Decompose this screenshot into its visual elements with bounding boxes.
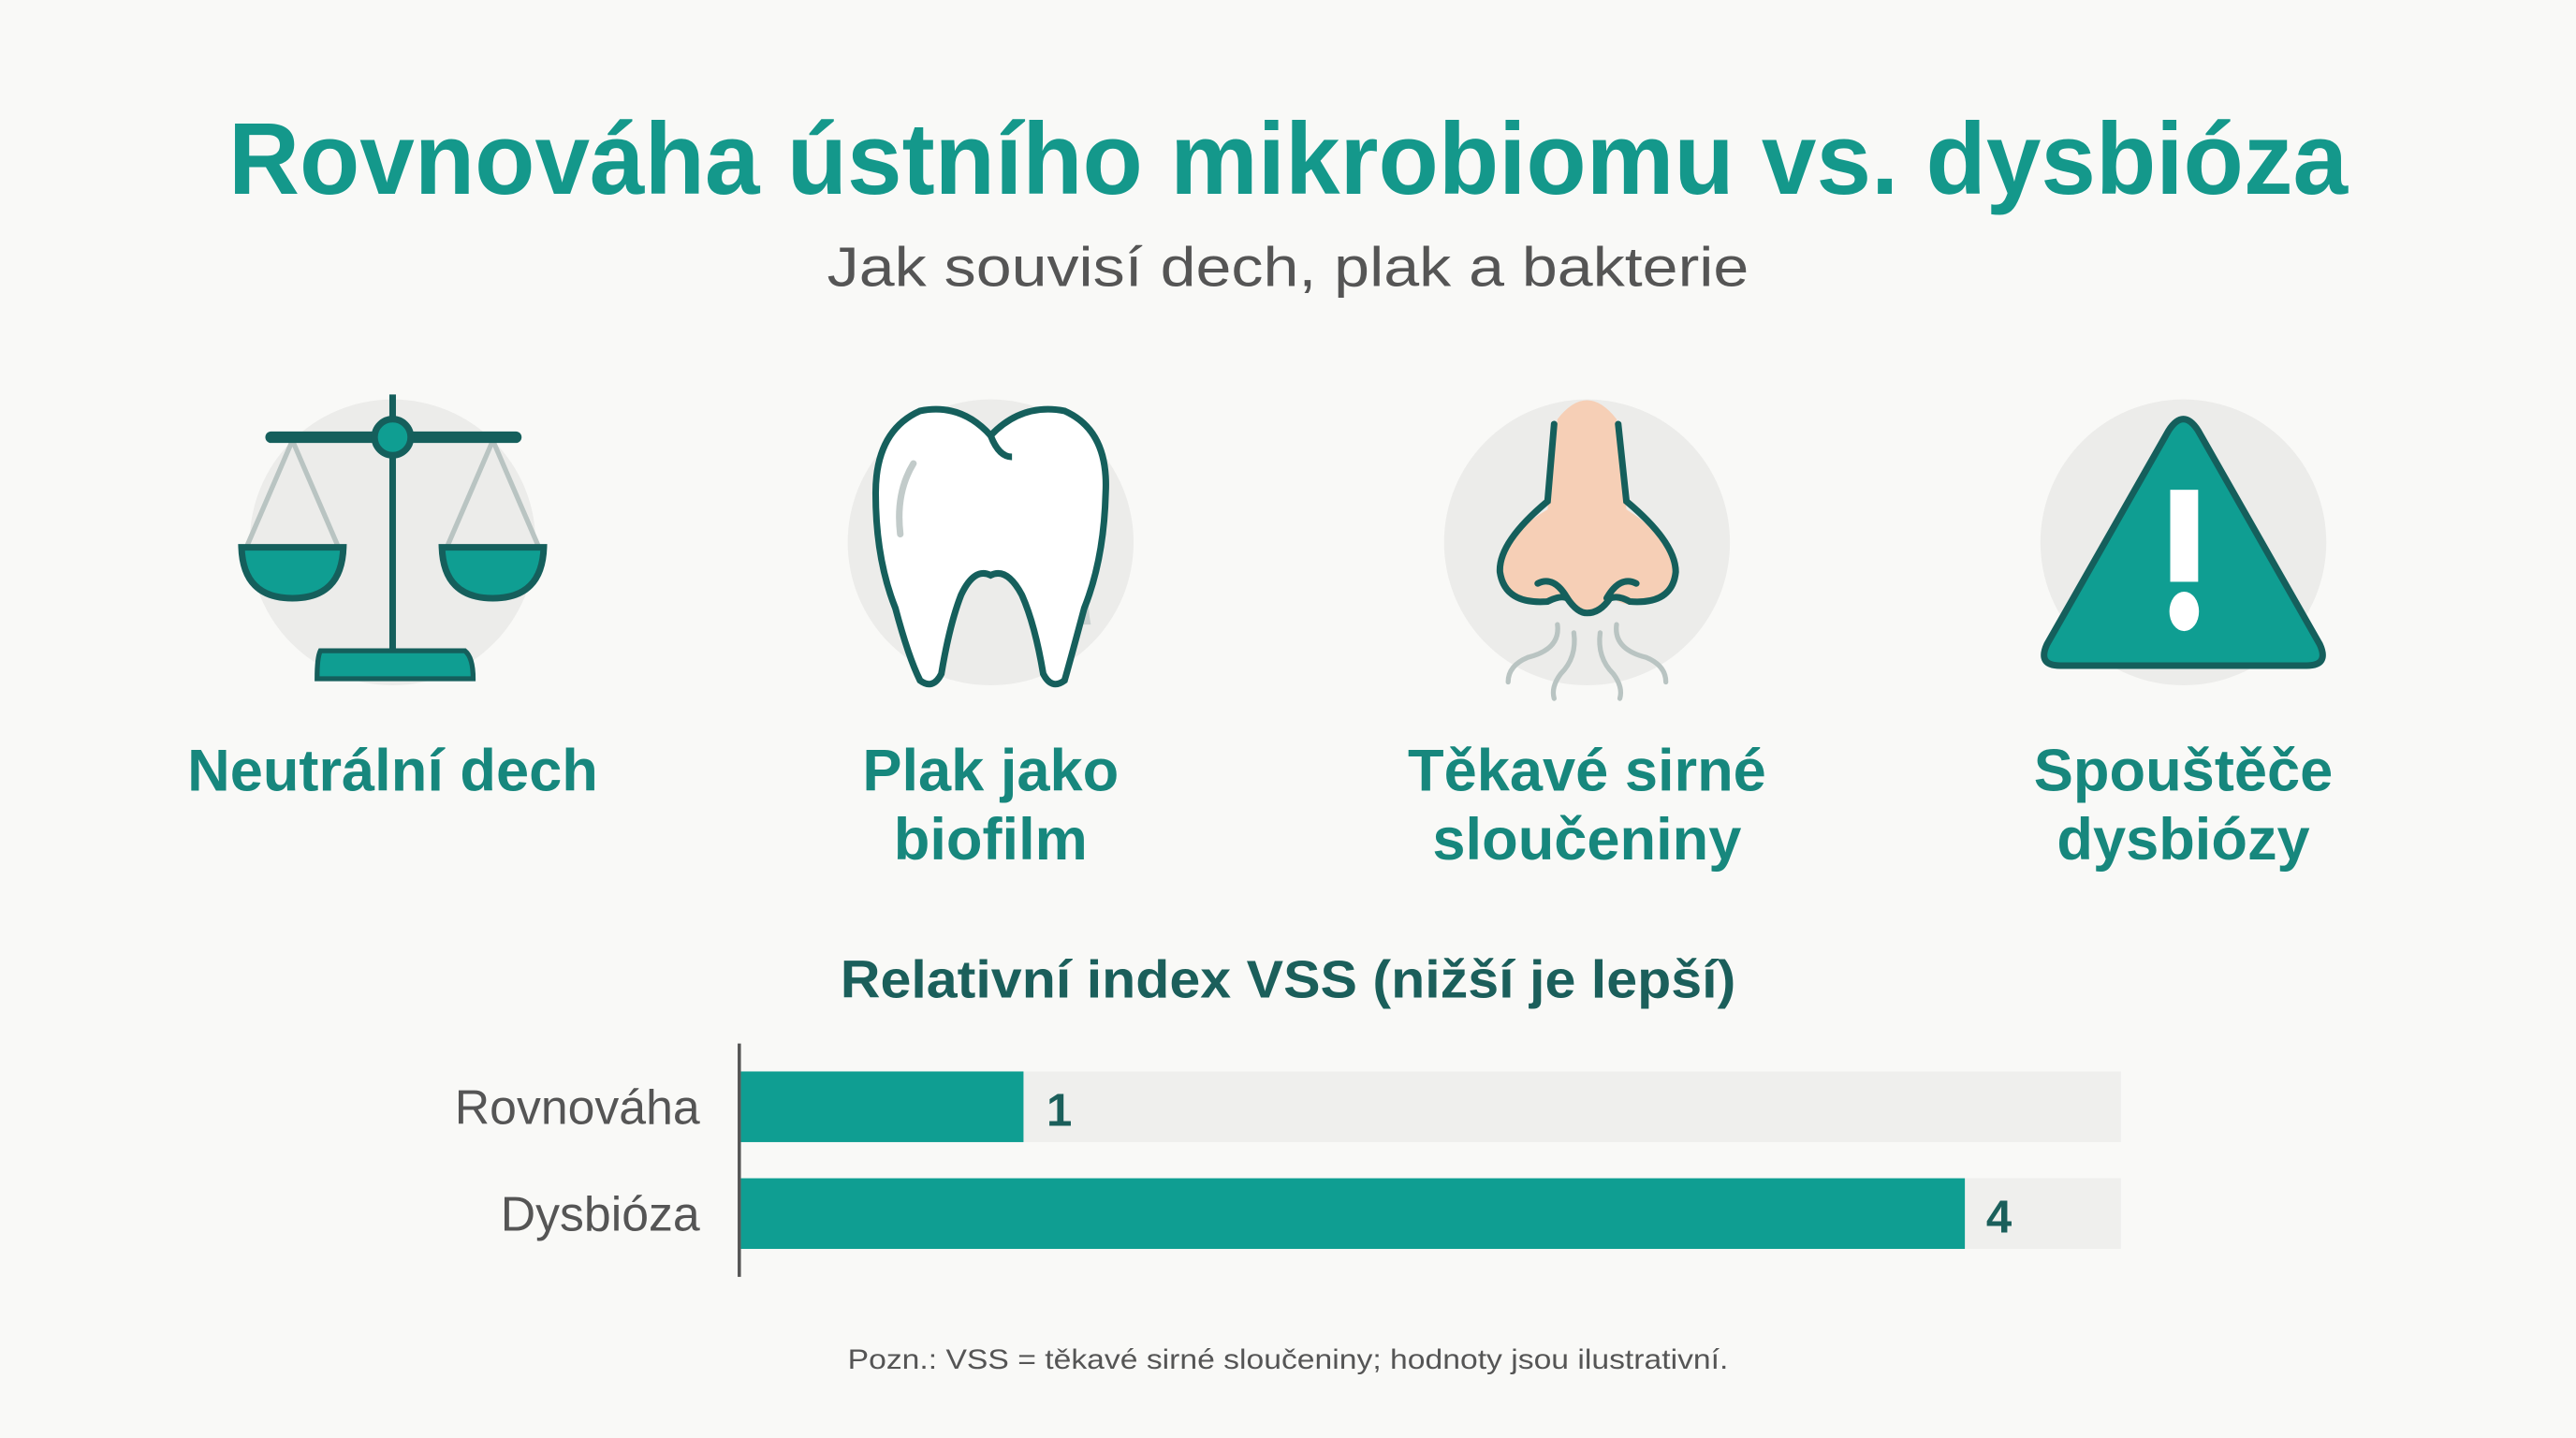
bar: Rovnováha (455, 1071, 2121, 1142)
label: plaque as biofilm: Plak jako (862, 738, 1119, 803)
panel: dysbiosis triggers (2034, 400, 2333, 873)
panel: neutral breath (187, 394, 598, 803)
bar chart (455, 1044, 2121, 1277)
bar: Rovnováha: Rovnováha (455, 1080, 700, 1135)
icon: tooth (848, 400, 1134, 685)
chart title: Relativní index VSS (nižší je lepší) (841, 949, 1735, 1008)
bar: Dysbióza: Dysbióza (501, 1187, 700, 1241)
bar: Rovnováha: 1 (1046, 1085, 1072, 1136)
panel: plaque: biofilm (894, 807, 1088, 873)
icon: warning triangle (2041, 400, 2326, 685)
panel: VSC: sloučeniny (1432, 807, 1741, 873)
subtitle: Jak souvisí dech, plak a bakterie (827, 236, 1749, 299)
footnote: Pozn.: VSS = těkavé sirné sloučeniny; hodnoty jsou ilustrativní. (848, 1344, 1728, 1375)
title: Rovnováha ústního mikrobiomu vs. dysbióza (228, 102, 2349, 216)
panel: plaque (848, 400, 1134, 873)
icon: nose (1444, 400, 1730, 698)
label: neutral breath: Neutrální dech (187, 738, 598, 803)
bar: Dysbióza (501, 1179, 2121, 1249)
label: dysbiosis triggers: Spouštěče (2034, 738, 2333, 803)
icon: scales (242, 394, 544, 685)
bar: Dysbióza: 4 (1986, 1192, 2012, 1242)
panel: dysbiosis triggers: dysbiózy (2056, 807, 2310, 873)
panel: VSC (1408, 400, 1766, 873)
label: volatile sulfur compounds: Těkavé sirné (1408, 738, 1766, 803)
